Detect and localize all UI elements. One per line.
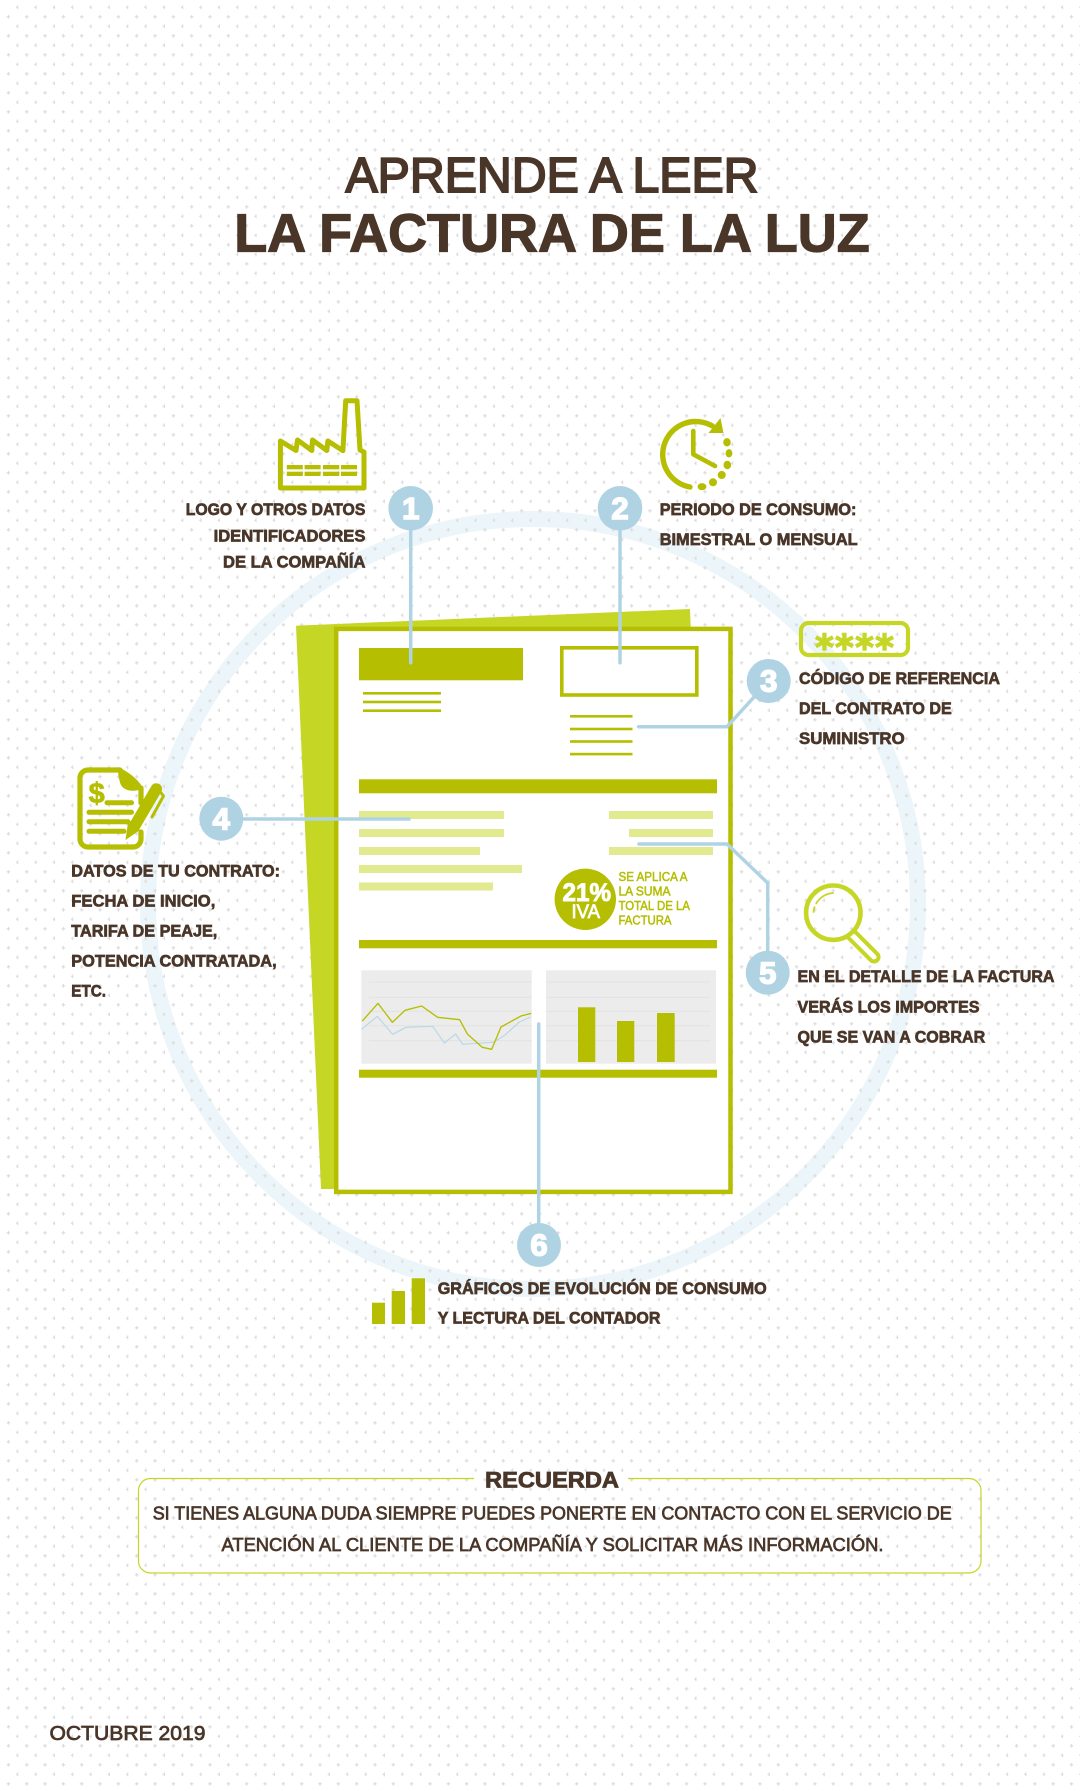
title: APRENDE A LEER [346, 148, 758, 203]
label 2 [660, 500, 858, 549]
title: LA FACTURA DE LA LUZ [234, 204, 870, 264]
IVA badge: 21% [562, 879, 611, 907]
label 2: PERIODO DE CONSUMO: [660, 500, 856, 519]
label 1: LOGO Y OTROS DATOS [186, 500, 365, 519]
label 4: TARIFA DE PEAJE, [71, 922, 217, 940]
IVA badge [555, 869, 616, 930]
reminder box [138, 1468, 981, 1573]
invoice document [296, 609, 730, 1192]
label 2: BIMESTRAL O MENSUAL [660, 530, 858, 549]
label 3 [799, 669, 1000, 748]
date: OCTUBRE 2019 [50, 1722, 206, 1745]
label 4 [71, 862, 280, 1000]
label 1 [186, 500, 365, 571]
IVA badge: IVA [572, 901, 600, 923]
IVA note: FACTURA [618, 913, 672, 928]
label 5: VERÁS LOS IMPORTES [798, 997, 980, 1016]
reminder text: SI TIENES ALGUNA DUDA SIEMPRE PUEDES PONERTE EN CONTACTO CON EL SERVICIO DE [153, 1503, 952, 1524]
label 3: DEL CONTRATO DE [799, 699, 952, 718]
reminder text: ATENCIÓN AL CLIENTE DE LA COMPAÑÍA Y SOLICITAR MÁS INFORMACIÓN. [222, 1534, 884, 1555]
front sheet [336, 629, 730, 1192]
label 5 [798, 967, 1054, 1046]
reference lines [570, 715, 632, 755]
IVA note: TOTAL DE LA [618, 898, 690, 913]
IVA note [618, 869, 690, 928]
reminder text [153, 1503, 952, 1555]
label 3: SUMINISTRO [799, 729, 905, 748]
icon: signed contract [80, 767, 164, 847]
callout 1: 1 [402, 491, 419, 526]
line chart [361, 970, 532, 1064]
callout 3 [639, 659, 791, 727]
icon: clock [663, 418, 732, 490]
IVA note: LA SUMA [618, 884, 671, 899]
label 5: QUE SE VAN A COBRAR [798, 1027, 985, 1046]
icon: bars [372, 1278, 425, 1324]
callout 4 [199, 797, 409, 841]
contract data lines [359, 811, 522, 890]
logo block [359, 648, 523, 680]
callout 4: 4 [213, 802, 231, 836]
label 6 [438, 1279, 767, 1328]
label 4: DATOS DE TU CONTRATO: [71, 862, 280, 880]
callout 1 [388, 486, 433, 663]
reminder heading: RECUERDA [485, 1468, 619, 1493]
bar chart [546, 970, 716, 1064]
callout 5 [639, 844, 790, 995]
label 4: ETC. [71, 982, 106, 1000]
label 4: POTENCIA CONTRATADA, [71, 952, 277, 971]
icon: masked code [801, 623, 908, 669]
label 1: IDENTIFICADORES [214, 526, 365, 545]
icon: factory [280, 401, 364, 488]
label 1: DE LA COMPAÑÍA [223, 551, 365, 571]
callout 6: 6 [530, 1228, 548, 1262]
section bars [359, 779, 717, 1078]
callout 6 [517, 1024, 561, 1267]
callout 5: 5 [759, 956, 776, 990]
callout 3: 3 [760, 664, 777, 698]
icon: magnifier [806, 886, 879, 962]
callout 2: 2 [611, 491, 629, 526]
label 5: EN EL DETALLE DE LA FACTURA [798, 967, 1054, 986]
IVA note: SE APLICA A [618, 869, 688, 884]
label 3: CÓDIGO DE REFERENCIA [799, 669, 1000, 688]
logo text lines [363, 692, 441, 712]
label 4: FECHA DE INICIO, [71, 892, 215, 910]
period box [562, 648, 697, 695]
background ring [148, 519, 918, 1289]
title [234, 148, 870, 264]
label 6: Y LECTURA DEL CONTADOR [438, 1308, 660, 1328]
back sheet [296, 609, 691, 1189]
invoice detail lines [609, 811, 713, 855]
callout 2 [598, 486, 642, 663]
icon: masked code: **** [815, 628, 894, 669]
icon: signed contract: $ [89, 778, 105, 810]
label 6: GRÁFICOS DE EVOLUCIÓN DE CONSUMO [438, 1279, 767, 1298]
